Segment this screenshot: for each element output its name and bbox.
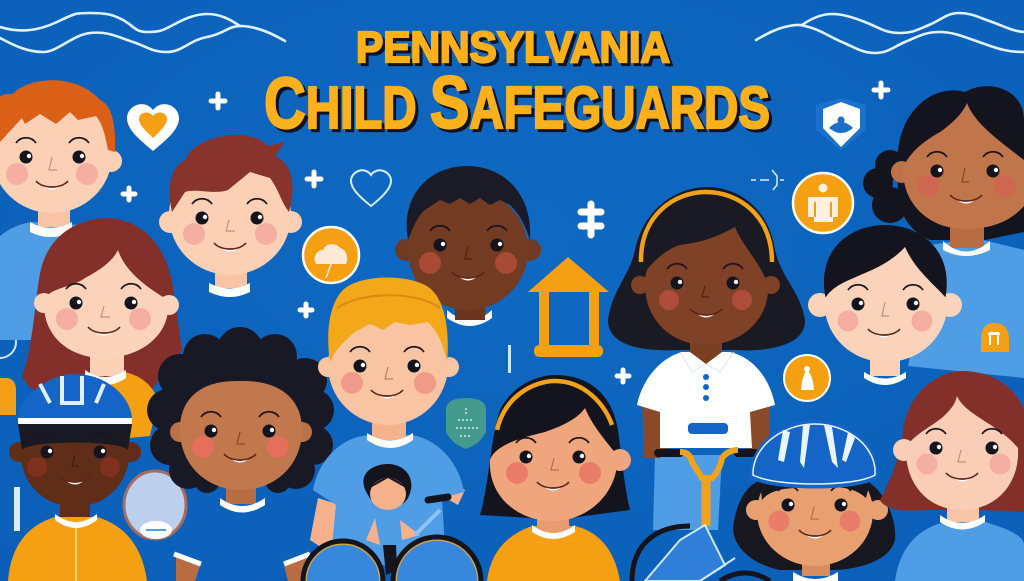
icon: heart badge [127,104,179,151]
arms [642,400,770,458]
icon: small house tag on shirt [981,323,1009,352]
child: dark skinned girl with headband and white polo [608,187,805,530]
face [757,458,873,566]
neck and collar [943,220,990,256]
child: black haired child center right [808,225,962,385]
ear [893,439,915,461]
face [328,305,448,425]
collar [55,514,97,528]
icon: green shield badge [446,398,486,449]
face [645,227,768,345]
polo shirt [637,352,775,448]
neck and collar [532,512,575,539]
icon: cross mark [581,204,601,235]
icon: small bell badge [784,355,830,401]
decorative waves left [0,13,285,52]
ear [609,449,631,471]
ears [34,293,179,315]
title line: Child Safeguards: CHILD SAFEGUARDS [264,61,770,144]
icon: shield [816,98,866,150]
neck and collar [940,500,985,530]
shirt [0,222,80,340]
neck [690,335,722,364]
ears [395,239,541,261]
hair back [880,371,1024,512]
face [18,403,132,507]
face [0,97,112,213]
child: girl with orange headband [480,375,631,581]
neck and collar [864,352,906,385]
neck [802,560,830,576]
hair [480,375,630,518]
curly hair [147,327,334,493]
child: boy with bike helmet left [8,374,147,581]
headband [497,381,612,430]
hair [0,80,115,152]
collar and neck [367,418,413,448]
child: blonde boy with bike print shirt [303,278,481,581]
child: girl with curly black hair [147,327,334,581]
hair back [22,218,182,392]
hair back [608,187,805,350]
icon: orange house [528,257,609,357]
scooter handle [658,450,755,526]
bike wheels [303,537,481,581]
face [180,381,302,490]
child: top right girl with curly hair [863,86,1024,378]
pants [653,455,722,530]
child: dark skinned boy [395,166,541,326]
sleeves and arms [174,554,310,581]
hair [328,278,448,362]
arms [310,480,465,555]
child: bottom right auburn girl [880,371,1024,581]
icon: outline heart [351,170,391,206]
shirt [313,435,464,565]
face [824,247,948,362]
ears [631,276,780,294]
zip [75,528,77,581]
neck and collar [209,268,250,297]
jacket [8,517,147,581]
face [891,103,1024,229]
face [169,155,291,275]
helmet [750,420,878,488]
ears [159,211,302,233]
ears [170,422,312,442]
ears and neck [9,442,141,517]
ear [100,150,122,172]
shirt [895,522,1024,581]
face [490,408,617,521]
face [906,396,1018,510]
neck and collar [220,484,265,512]
neck and collar [85,350,126,385]
child: boy with orange hair [0,80,122,340]
orange shirt [110,372,158,440]
collar and neck [447,300,492,326]
collar [793,572,838,581]
icon: person support badge [793,173,853,233]
shirt [908,238,1024,378]
icon: small compass dashes [751,170,784,190]
child: boy with brown hair [159,135,302,297]
shirt [487,526,620,581]
icon: cloud circle badge [303,227,359,283]
child: bubble helmet object [124,471,186,539]
ears [746,500,888,520]
child: bottom girl with blue bike helmet [733,420,895,581]
bike frame and wheel [632,525,770,581]
face [408,190,528,310]
decorative waves right [756,13,1024,53]
headband [641,192,772,262]
hair and ears [808,225,962,317]
helmet [18,374,132,424]
child: girl with auburn hair [22,218,182,440]
face [44,250,168,358]
collar and neck [30,205,72,237]
hair [863,86,1024,240]
polo buttons [688,374,728,434]
hair [170,135,292,212]
hair lines [337,295,440,308]
icon: plus marks [123,83,888,382]
title [264,23,770,144]
title line: Pennsylvania: PENNSYLVANIA [356,23,670,72]
polo collar [680,352,734,372]
hair [733,480,895,570]
ears [318,357,459,377]
left edge shapes [0,326,511,531]
hair [407,166,530,240]
print: small girl on bike [363,464,448,575]
